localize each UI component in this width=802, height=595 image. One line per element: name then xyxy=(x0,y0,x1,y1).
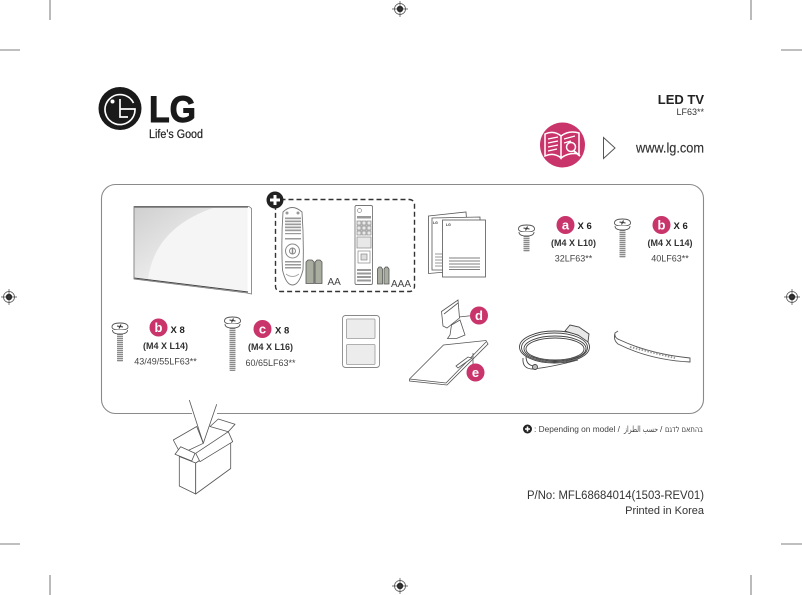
AAA batteries xyxy=(378,267,389,284)
foam packing xyxy=(342,316,380,368)
model c: 60/65LF63** xyxy=(245,358,296,368)
quantity b: X 8 xyxy=(170,325,185,336)
registration mark: top xyxy=(392,1,408,17)
printed in: Printed in Korea xyxy=(625,505,705,517)
size a: (M4 X L10) xyxy=(551,238,596,248)
registration mark: bottom xyxy=(392,578,408,594)
power cable xyxy=(520,325,590,370)
badge e: e xyxy=(472,365,479,380)
standard remote xyxy=(355,206,372,284)
LG logo: Life's Good xyxy=(149,129,203,141)
magic remote xyxy=(282,208,303,285)
cable strip xyxy=(614,331,690,362)
size b: (M4 X L14) xyxy=(143,341,188,351)
product title: LF63** xyxy=(676,107,704,117)
TV xyxy=(134,206,252,294)
manuals: LG xyxy=(433,221,438,225)
screw and label: b, 43/49/55LF63 xyxy=(112,318,197,366)
badge a: a xyxy=(562,218,570,232)
footnote hebrew: בהתאם לדגם xyxy=(665,425,703,434)
product title: LED TV xyxy=(658,92,704,107)
panel: package contents xyxy=(102,184,704,414)
stand body d xyxy=(442,300,465,338)
size c: (M4 X L16) xyxy=(248,342,293,352)
quantity b: X 6 xyxy=(674,221,688,232)
screw c xyxy=(224,317,240,371)
product title xyxy=(658,92,704,117)
footnote slash: / xyxy=(660,424,663,434)
AAA label: AAA xyxy=(391,279,411,290)
screw and label: c, 60/65LF63 xyxy=(224,317,296,371)
website: www.lg.com xyxy=(635,140,704,156)
arrow xyxy=(604,138,615,158)
registration mark: right xyxy=(784,289,800,305)
size b: (M4 X L14) xyxy=(647,238,693,248)
icon: plus badge xyxy=(266,192,284,208)
manuals xyxy=(428,212,486,277)
footnote xyxy=(523,424,703,435)
footnote english: : Depending on model / xyxy=(534,424,621,434)
screw a xyxy=(518,225,534,252)
model b: 40LF63** xyxy=(651,254,689,264)
stand xyxy=(410,300,488,385)
stand base e xyxy=(410,340,488,385)
LG logo xyxy=(98,87,203,141)
badge b: b xyxy=(155,320,163,335)
screw and label: b, 40LF63 xyxy=(614,216,693,264)
badge d: d xyxy=(475,308,483,323)
quantity a: X 6 xyxy=(578,221,592,232)
footnote arabic: حسب الطراز xyxy=(623,425,658,435)
screw b long xyxy=(112,323,128,362)
screw and label: a, 32LF63 xyxy=(518,216,596,264)
quantity c: X 8 xyxy=(275,326,289,336)
part number: P/No: MFL68684014(1503-REV01) xyxy=(527,490,704,502)
badge b: b xyxy=(658,218,666,232)
manuals: LG xyxy=(446,223,451,227)
AA batteries xyxy=(306,260,322,284)
registration mark: left xyxy=(1,289,17,305)
icon: plus xyxy=(523,424,532,434)
dashed box: optional remotes xyxy=(266,192,414,292)
screw b xyxy=(614,219,630,258)
LG logo: LG xyxy=(149,89,196,130)
open box with wedge xyxy=(173,400,235,494)
badge c: c xyxy=(259,322,266,336)
model a: 32LF63** xyxy=(555,254,593,264)
model b: 43/49/55LF63** xyxy=(134,356,197,366)
AA label: AA xyxy=(328,277,341,288)
icon: manual book with magnifier xyxy=(540,122,585,168)
